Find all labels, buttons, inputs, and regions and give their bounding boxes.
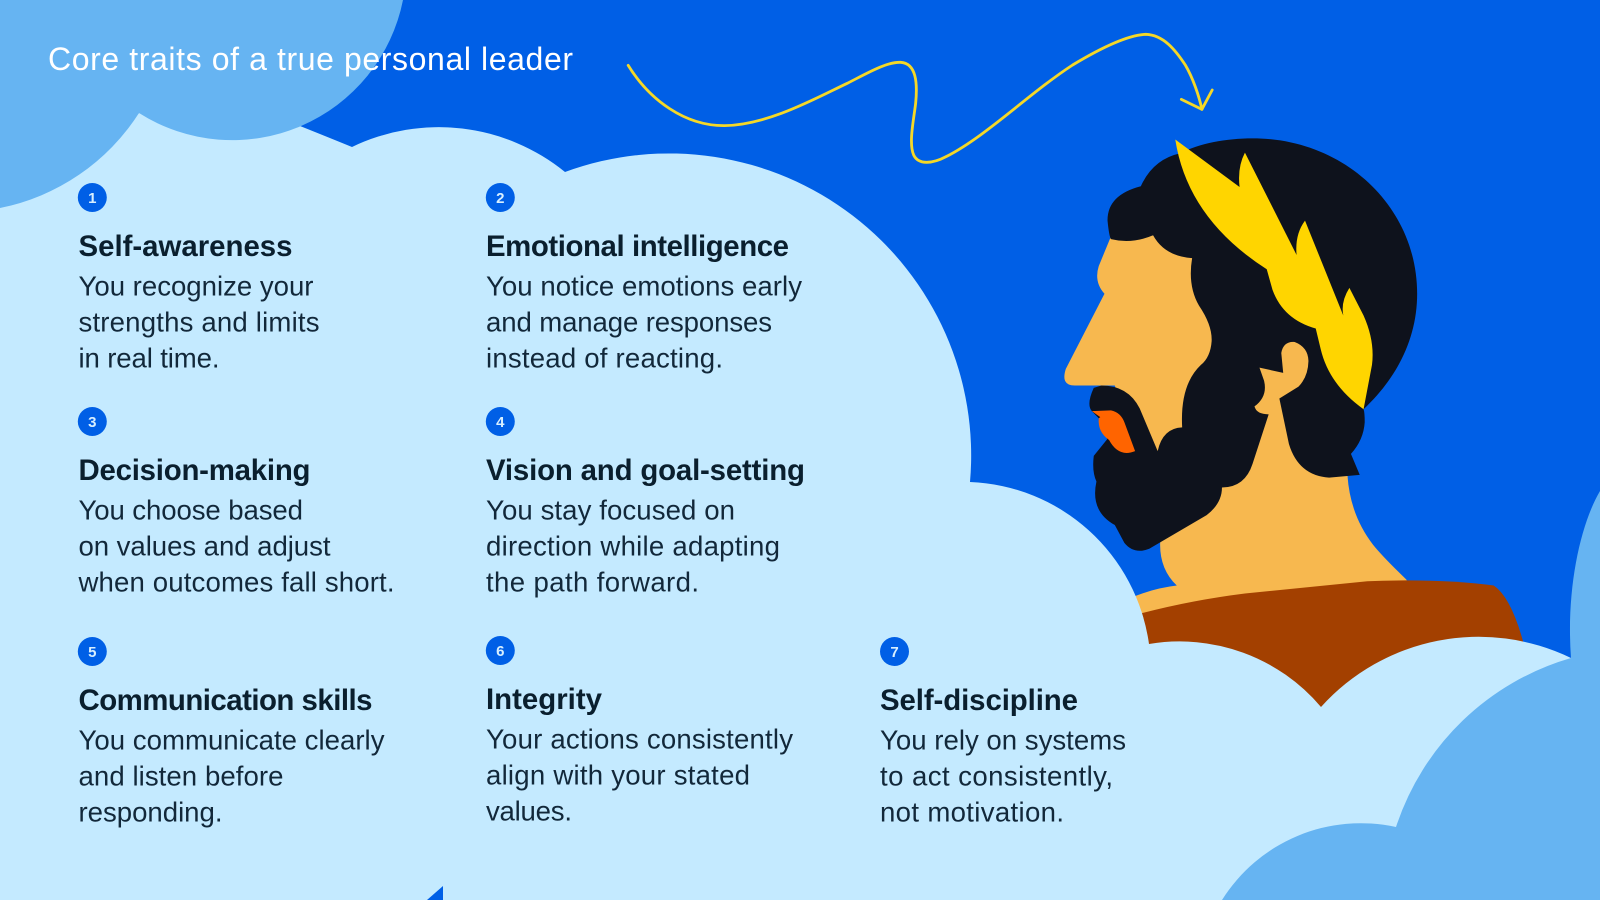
blue corner triangle [427,886,443,900]
illustration: leader portrait [1064,138,1526,741]
trait 1: self-awareness [78,183,320,374]
trait 6: integrity: 6 [496,643,504,660]
medium blue cloud top left [0,0,403,208]
tunic [1142,580,1526,741]
trait 6: integrity: Your actions consistently [486,724,793,754]
hair and beard [1089,138,1417,551]
medium blue cloud bottom right [1222,491,1600,900]
trait 4: vision and goal-setting: Vision and goal-setting [486,454,805,487]
trait 7: self-discipline: Self-discipline [880,684,1078,717]
trait 3: decision-making [78,407,394,598]
trait 4: vision and goal-setting: You stay focused on [486,494,735,526]
trait 7: self-discipline: to act consistently, [880,760,1113,792]
trait 7: self-discipline: You rely on systems [880,724,1126,756]
trait 7: self-discipline: not motivation. [880,796,1064,828]
trait 4: vision and goal-setting [486,407,805,598]
trait 5: communication skills: You communicate clearly [78,724,385,756]
trait 1: self-awareness: Self-awareness [78,230,292,263]
trait 3: decision-making: 3 [88,414,96,431]
trait 1: self-awareness: 1 [88,190,96,207]
arrow: curved yellow [628,34,1212,162]
trait 6: integrity: align with your stated [486,760,750,790]
trait 5: communication skills: responding. [78,796,222,828]
laurel wreath [1175,140,1373,409]
trait 2: emotional intelligence: You notice emotions early [486,270,802,302]
trait 7: self-discipline: 7 [890,644,899,661]
trait 3: decision-making: on values and adjust [78,530,331,562]
trait 2: emotional intelligence: instead of reacting. [486,342,723,374]
trait 1: self-awareness: You recognize your [78,270,314,302]
trait 1: self-awareness: in real time. [78,342,220,374]
trait 7: self-discipline [880,637,1126,828]
trait 1: self-awareness: strengths and limits [78,306,320,338]
trait 6: integrity: Integrity [486,683,603,716]
trait 4: vision and goal-setting: direction while adapting [486,530,780,562]
trait 5: communication skills: and listen before [78,760,284,792]
trait 3: decision-making: Decision-making [78,454,310,487]
trait 4: vision and goal-setting: the path forward. [486,566,699,598]
trait 5: communication skills: 5 [88,644,96,661]
lip [1092,410,1135,453]
trait 2: emotional intelligence: Emotional intelligence [486,230,789,263]
trait 6: integrity: values. [486,796,572,826]
trait 2: emotional intelligence [486,183,802,374]
trait 6: integrity [486,636,793,826]
trait 5: communication skills [78,637,385,828]
trait 2: emotional intelligence: 2 [496,190,504,207]
skin: face and neck [1064,234,1421,673]
trait 2: emotional intelligence: and manage responses [486,306,772,338]
trait 4: vision and goal-setting: 4 [496,414,505,431]
trait 3: decision-making: when outcomes fall short. [78,566,394,598]
title: Core traits of a true personal leader [48,41,573,77]
trait 5: communication skills: Communication skills [78,684,372,717]
trait 3: decision-making: You choose based [78,494,303,526]
